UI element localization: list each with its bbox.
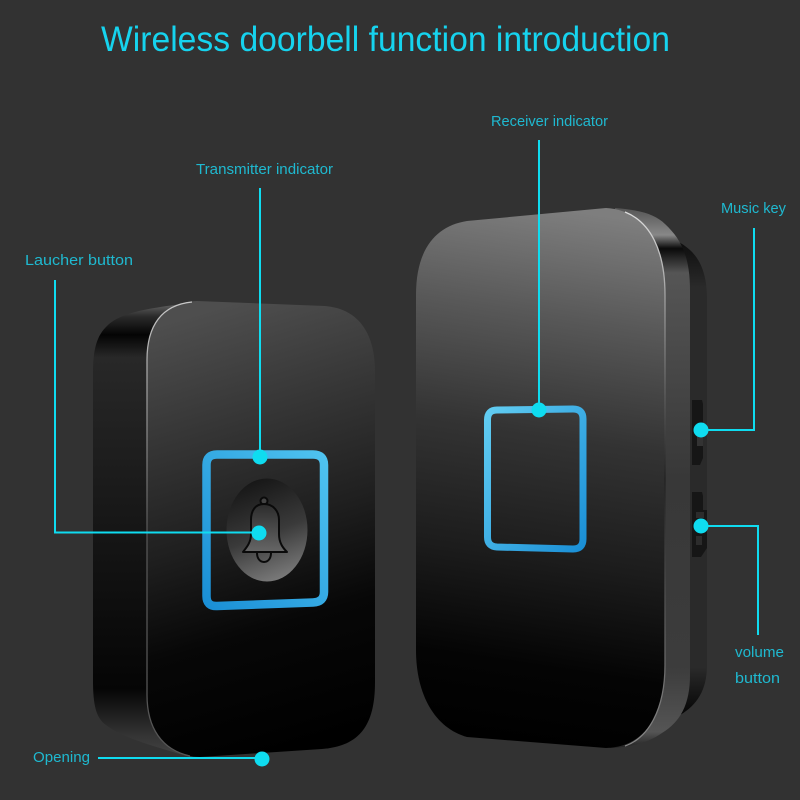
callout: opening line [98, 752, 270, 766]
label: receiver indicator: Receiver indicator [491, 113, 608, 130]
callout: music key line [694, 228, 754, 438]
launcher button [226, 478, 308, 582]
transmitter front face [147, 301, 375, 757]
label: volume button: button [735, 670, 780, 687]
volume button [692, 492, 707, 557]
receiver indicator ring [488, 409, 583, 549]
receiver face edge highlight [625, 212, 665, 746]
transmitter face edge highlight [147, 302, 192, 756]
label: volume button: volume [735, 644, 784, 661]
title: Wireless doorbell function introduction [101, 20, 670, 59]
receiver rear housing [675, 240, 707, 715]
label: launcher button: Laucher button [25, 252, 133, 269]
device: transmitter [93, 301, 375, 757]
callout: transmitter indicator line [252, 188, 268, 464]
icon: bell [243, 498, 287, 562]
transmitter side shell [93, 303, 200, 757]
receiver side shell [610, 208, 690, 748]
music key button [692, 400, 703, 465]
label: opening: Opening [33, 749, 90, 766]
device: receiver [416, 208, 707, 748]
callout: receiver indicator line [532, 140, 546, 418]
label: transmitter indicator: Transmitter indicator [196, 161, 333, 178]
callout: volume button line [694, 518, 758, 635]
transmitter indicator ring [206, 454, 324, 606]
receiver front face [416, 208, 665, 748]
label: music key: Music key [721, 200, 786, 217]
callout: launcher button line [55, 280, 266, 540]
